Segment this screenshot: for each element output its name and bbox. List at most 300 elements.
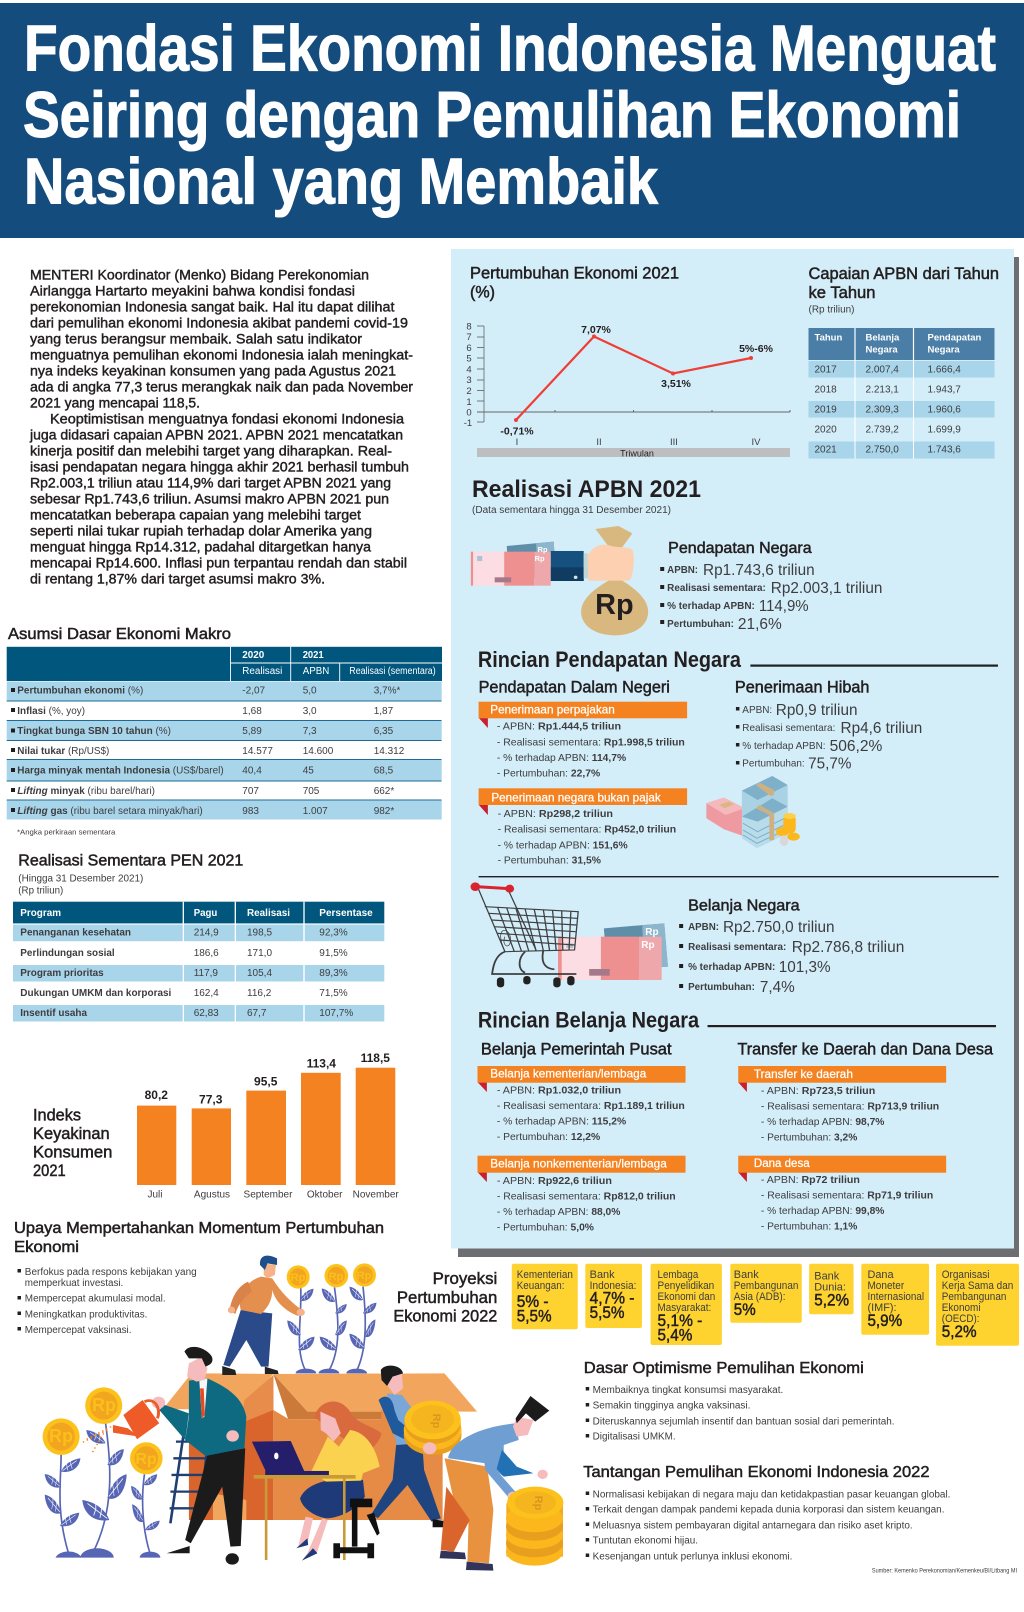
month labels: Agustus [194,1189,230,1200]
card: Bank Indonesia [585,1264,642,1328]
table rows: 62,83 [194,1008,219,1019]
table rows: 662* [374,786,394,797]
block: Dasar Optimisme Pemulihan Ekonomi: Dasar Optimisme Pemulihan Ekonomi [584,1360,864,1377]
list: kementerian: - Pertumbuhan: 12,2% [497,1132,601,1143]
block: Belanja Negara: Belanja Negara [688,898,800,915]
ribbon: Belanja nonkementerian/lembaga [477,1156,686,1182]
block: Belanja Negara: % terhadap APBN: [688,962,775,973]
data line [514,334,753,422]
card: ADB: Pembangunan [734,1280,798,1292]
ribbon: Transfer ke daerah: Transfer ke daerah [754,1069,853,1081]
table rows: 162,4 [194,988,219,999]
card: Bank Indonesia: 4,7% - [590,1288,634,1308]
intro text block: yang terus berangsur membaik. Salah satu indikator [30,332,363,346]
chart title: Keyakinan [33,1125,110,1143]
list: dana desa [761,1175,933,1233]
section: Penerimaan Hibah: Pertumbuhan: [742,758,805,770]
table rows [13,925,384,1022]
bar values: 80,2 [145,1088,168,1102]
table rows: 186,6 [194,948,219,959]
list: bukan pajak: - Pertumbuhan: 31,5% [498,856,602,867]
table rows: 2020 [814,424,837,436]
table heading: (Rp triliun) [808,304,854,316]
table heading [18,852,243,896]
list: upaya: memperkuat investasi. [25,1278,123,1289]
man carrying coins [367,1366,462,1536]
table rows: 107,7% [319,1008,353,1019]
block: Tantangan Pemulihan Ekonomi Indonesia 2022: Meluasnya sistem pembayaran digital antarnegara dan risiko aset kripto. [593,1520,913,1531]
intro text block [29,268,414,586]
table rows: Nilai tukar (Rp/US$) [17,746,109,757]
table header: Persentase [319,908,373,919]
block: Belanja Negara: 7,4% [760,979,795,996]
data labels: 5%-6% [739,343,774,355]
intro text block: seperti nilai tukar rupiah terhadap dolar Amerika yang [30,524,372,538]
icon: shopping cart with banknotes [471,882,668,987]
heading: Pertumbuhan [397,1288,497,1307]
panel: projections, optimism and challenges [393,1264,1019,1575]
icon: hand with money bag [471,526,648,635]
table rows: 105,4 [247,968,272,979]
card: Bank Indonesia: Bank [590,1269,615,1281]
section: Belanja Pemerintah Pusat [477,1040,686,1234]
table rows: 7,3 [303,726,317,737]
table header: Tahun [814,332,842,344]
table rows: 117,9 [194,968,218,979]
list: dana desa: - % terhadap APBN: 99,8% [761,1206,885,1217]
heading [393,1269,497,1326]
list: bukan pajak [498,809,676,867]
list: transfer: - % terhadap APBN: 98,7% [761,1117,885,1128]
intro text block: ada di angka 77,3 terus merangkak naik dan pada November [30,380,414,394]
block: Tantangan Pemulihan Ekonomi Indonesia 2022: Tantangan Pemulihan Ekonomi Indonesia 2022 [583,1464,930,1481]
table rows: Perlindungan sosial [20,948,115,959]
bar chart: Indeks Keyakinan Konsumen 2021 [33,1051,399,1200]
card: LPEM: 5,1% - [658,1311,702,1330]
section: Penerimaan Hibah: Rp0,9 triliun [776,702,857,719]
block: Pendapatan Negara: Realisasi sementara: [667,583,766,594]
table heading: Realisasi Sementara PEN 2021 [18,852,243,870]
intro text block: isasi pendapatan negara hingga akhir 2021 berhasil tumbuh [30,460,409,474]
table rows: Program prioritas [20,968,104,979]
ribbon: Belanja nonkementerian/lembaga: Belanja nonkementerian/lembaga [490,1159,667,1171]
block: Belanja Negara: APBN: [688,922,719,933]
table: Realisasi Sementara PEN 2021 [13,852,384,1022]
card: Kementerian Keuangan: Keuangan: [517,1280,564,1292]
table rows: Tingkat bunga SBN 10 tahun (%) [17,726,171,737]
intro text block: mencatatkan beberapa capaian yang melebihi target [30,508,361,522]
table header: Program [20,908,61,919]
block: Dasar Optimisme Pemulihan Ekonomi: Diteruskannya sejumlah insentif dan bantuan sosial dari pemerintah. [593,1416,895,1427]
list: kementerian [497,1085,685,1143]
block: Dasar Optimisme Pemulihan Ekonomi: Membaiknya tingkat konsumsi masyarakat. [593,1385,783,1396]
heading: Upaya Mempertahankan Momentum: Ekonomi [14,1239,79,1256]
heading: Rincian Belanja Negara: Rincian Belanja Negara [478,1008,700,1033]
coins [43,1263,376,1474]
list: bukan pajak: - APBN: Rp298,2 triliun [498,809,613,820]
ribbon: Belanja kementerian/lembaga [477,1066,686,1092]
chart heading [470,264,679,302]
table rows: 705 [303,786,320,797]
chart title: Indeks [33,1106,81,1124]
table rows: 171,0 [247,948,272,959]
table heading: ke Tahun [808,284,876,302]
list: transfer: - Realisasi sementara: Rp713,9 triliun [761,1102,939,1113]
table rows: 3,7%* [374,686,400,697]
table heading: (Rp triliun) [18,886,63,896]
block: Pendapatan Negara: % terhadap APBN: [667,601,755,612]
card: Bank Dunia: Bank [814,1270,840,1283]
table rows: 6,35 [374,726,394,737]
table rows [808,361,994,458]
card: LPEM: Penyelidikan [658,1280,714,1292]
month labels: September [244,1189,293,1200]
card: IMF: Dana [867,1269,894,1281]
section: Belanja Pemerintah Pusat: Belanja Pemerintah Pusat [481,1040,672,1058]
ribbon: Belanja kementerian/lembaga: Belanja kementerian/lembaga [490,1068,647,1080]
month labels: November [353,1189,399,1200]
card: OECD: Kerja Sama dan [942,1280,1013,1292]
card: IMF: Moneter [867,1280,905,1292]
coin labels: Rp [329,1271,344,1283]
intro text block: 2021 yang mencapai 118,5. [30,396,200,410]
month labels: Juli [147,1189,163,1200]
heading: Realisasi APBN 2021: (Data sementara hingga 31 Desember 2021) [472,505,671,516]
table rows: 1.943,7 [928,384,961,396]
coin labels: Rp [430,1414,442,1429]
data labels: 3,51% [661,378,692,390]
card: Bank Indonesia: Indonesia: [590,1280,636,1292]
y axis: 1 [466,397,472,408]
block: Pendapatan Negara: 21,6% [738,616,782,633]
intro text block: Keoptimistisan menguatnya fondasi ekonomi Indonesia [50,412,405,426]
table rows: Insentif usaha [20,1008,87,1019]
table rows: 1.699,9 [928,424,961,436]
month labels [147,1189,399,1200]
table header: 2020 [242,650,265,661]
card: IMF [861,1264,929,1335]
heading: Realisasi APBN 2021 [472,476,701,516]
list: dana desa: - Realisasi sementara: Rp71,9 triliun [761,1190,933,1201]
chart title: 2021 [33,1162,66,1180]
list: upaya: Berfokus pada respons kebijakan yang [25,1267,197,1278]
list: nonkementerian: - APBN: Rp922,6 triliun [497,1176,612,1187]
bar values: 118,5 [361,1051,390,1065]
y axis: 4 [466,364,472,376]
ribbon: Dana desa [738,1156,946,1182]
card: Bank Indonesia: 5,5% [590,1303,624,1322]
block: Pendapatan Negara: Rp1.743,6 triliun [703,562,815,579]
box [163,1373,477,1520]
list: upaya: Mempercepat akumulasi modal. [25,1294,166,1305]
list: transfer [761,1086,939,1144]
table rows: 1.960,6 [928,404,961,416]
table rows: 5,0 [303,686,317,697]
block: Pendapatan Negara: Pendapatan Negara [668,540,812,557]
table rows: Lifting minyak (ribu barel/hari) [17,786,155,797]
intro text block: menguat hingga Rp14.312, padahal ditargetkan hanya [30,540,372,554]
y axis: 6 [466,343,472,354]
block: Tantangan Pemulihan Ekonomi Indonesia 2022: Normalisasi kebijakan di negara maju dan ketidakpastian pasar keuangan global. [593,1489,950,1500]
chart title: Konsumen [33,1144,112,1162]
section: Penerimaan Hibah [735,679,922,773]
card: OECD: (OECD): [942,1313,980,1325]
section: Penerimaan Hibah: % terhadap APBN: [742,741,826,752]
table rows: 2.007,4 [866,364,899,376]
table rows: 2.309,3 [866,404,899,416]
Triwulan axis bar [477,448,790,458]
table rows: Inflasi (%, yoy) [17,706,85,717]
chart title [33,1106,112,1180]
intro text block: perekonomian Indonesia sangat baik. Hal itu dapat dilihat [30,300,395,314]
ribbon: Penerimaan perpajakan: Penerimaan perpajakan [490,705,615,717]
table rows: 2018 [814,384,837,396]
man lifting coins [440,1396,563,1571]
icon: hand with money bag: Rp [538,545,548,554]
heading: Proyeksi [433,1269,497,1288]
plants left [60,1287,365,1553]
table header: Pendapatan [928,332,982,344]
coin labels: Rp [357,1270,372,1282]
block: Dasar Optimisme Pemulihan Ekonomi: Semakin tingginya angka vaksinasi. [593,1401,750,1412]
quarter labels: IV [752,437,761,448]
line chart: Pertumbuhan Ekonomi 2021 [464,264,790,458]
coin labels [49,1270,544,1511]
coin labels: Rp [532,1496,544,1511]
y axis: 5 [466,354,472,364]
list: perpajakan: - Realisasi sementara: Rp1.998,5 triliun [497,737,685,748]
section: Penerimaan Hibah: 75,7% [808,755,852,773]
footnote: *Angka perkiraan sementara [17,828,116,837]
section: Transfer ke Daerah dan Dana Desa [738,1040,994,1233]
table rows: 707 [242,786,259,797]
y axis: 2 [466,386,472,397]
list: upaya [18,1267,197,1336]
table rows: Pertumbuhan ekonomi (%) [17,686,143,697]
card: ADB: Bank [734,1269,759,1281]
table header: APBN [303,666,329,677]
card: OECD [936,1264,1019,1346]
table rows: Lifting gas (ribu barel setara minyak/hari) [17,806,203,817]
Triwulan axis bar: Triwulan [620,448,654,458]
list: nonkementerian: - Realisasi sementara: Rp812,0 triliun [497,1191,676,1202]
table rows: 2017 [814,364,837,376]
section: Penerimaan Hibah: APBN: [742,705,772,716]
header banner [0,3,1024,238]
section: Pendapatan Dalam Negeri: Pendapatan Dalam Negeri [479,679,670,697]
list: upaya: Mempercepat vaksinasi. [25,1325,131,1336]
list: bukan pajak: - % terhadap APBN: 151,6% [498,840,628,851]
list: transfer: - Pertumbuhan: 3,2% [761,1133,858,1144]
list: perpajakan: - APBN: Rp1.444,5 triliun [497,722,621,733]
card: Bank Dunia: Dunia: [814,1281,846,1294]
list: nonkementerian: - Pertumbuhan: 5,0% [497,1223,595,1234]
table header [808,328,994,458]
table header: Belanja [866,332,900,344]
list: upaya: Meningkatkan produktivitas. [25,1309,147,1320]
y axis: -1 [464,418,472,429]
card: Kementerian Keuangan: Kementerian [517,1269,573,1281]
card: LPEM: Masyarakat: [658,1302,711,1314]
chart heading: Pertumbuhan Ekonomi 2021 [470,264,679,282]
block: Proyeksi Pertumbuhan Ekonomi 2022 [393,1264,1019,1346]
ribbon: Penerimaan perpajakan [479,702,687,728]
panel: APBN blue background with shadow [451,249,1019,1257]
ladder [170,1423,207,1523]
table rows: 983 [242,806,259,817]
bars [137,1068,395,1185]
quarter labels: III [670,437,678,448]
bar values: 113,4 [307,1056,336,1070]
title: Nasional yang Membaik [24,144,659,218]
heading: Ekonomi 2022 [393,1306,497,1326]
card: Bank Dunia: 5,2% [814,1290,849,1310]
table header [7,647,442,681]
table header: Pagu [194,908,217,919]
ribbon: Transfer ke daerah [738,1066,946,1092]
list: nonkementerian [497,1176,676,1234]
heading: Upaya Mempertahankan Momentum [14,1220,384,1256]
block: Pendapatan Negara [660,540,882,633]
intro text block: menguatnya pemulihan ekonomi Indonesia ialah meningkat- [30,348,413,362]
intro text block: di rentang 1,87% dari target asumsi makro 3%. [30,572,325,586]
table rows: 2.739,2 [866,424,899,436]
y axis: 7 [466,332,472,343]
section: Penerimaan Hibah: Penerimaan Hibah [735,679,869,697]
table rows: Dukungan UMKM dan korporasi [20,988,172,999]
icon: stacks of money and coins [706,776,800,848]
card: ADB: 5% [734,1300,756,1319]
quarter labels [516,437,761,448]
block: Pendapatan Negara: APBN: [667,565,698,576]
coin labels: Rp [135,1451,157,1468]
list: kementerian: - % terhadap APBN: 115,2% [497,1116,627,1127]
table header: Realisasi [242,666,282,677]
table rows: -2,07 [242,686,266,697]
table header: Realisasi (sementara) [349,666,436,677]
card: ADB [730,1264,802,1323]
y axis: 8 [466,322,472,332]
man on top of box [222,1256,305,1375]
table header: 2021 [303,650,324,661]
table rows: 92,3% [319,928,348,939]
list: perpajakan: - % terhadap APBN: 114,7% [497,753,627,764]
table rows: 89,3% [319,968,348,979]
block: Dasar Optimisme Pemulihan Ekonomi [584,1360,895,1443]
table rows: 40,4 [242,766,262,777]
title [23,12,996,218]
card: ADB: Asia (ADB): [734,1291,785,1303]
y axis: 3 [466,375,472,386]
block: Tantangan Pemulihan Ekonomi Indonesia 2022: Tuntutan ekonomi hijau. [593,1536,698,1547]
ribbon: Penerimaan negara bukan pajak: Penerimaan negara bukan pajak [491,792,661,804]
table rows [7,682,442,820]
coin labels: Rp [92,1395,116,1415]
intro text block: mencapai Rp14.600. Inflasi pun terpantau rendah dan stabil [30,556,407,570]
intro text block: MENTERI Koordinator (Menko) Bidang Perekonomian [30,268,369,282]
section: Penerimaan Hibah: Realisasi sementara: [742,723,835,734]
table: Asumsi Dasar Ekonomi Makro [7,626,442,837]
quarter labels: II [596,437,602,448]
list: dana desa: - APBN: Rp72 triliun [761,1175,860,1186]
table rows: 14.577 [242,746,273,757]
table rows: 198,5 [247,928,272,939]
block: Belanja Negara: Rp2.750,0 triliun [723,919,835,936]
block: Belanja Negara: Pertumbuhan: [688,982,755,993]
quarter labels: I [516,437,518,448]
heading: Rincian Pendapatan Negara: Rincian Pendapatan Negara [478,647,742,672]
table heading [808,265,999,316]
chart heading: (%) [470,284,495,302]
bar values [145,1051,390,1106]
card: Bank Dunia [809,1264,854,1314]
card: LPEM: Ekonomi dan [658,1291,715,1303]
woman at laptop [252,1402,382,1561]
table header: Realisasi [247,908,290,919]
section: Transfer ke Daerah dan Dana Desa: Transfer ke Daerah dan Dana Desa [738,1040,994,1058]
table rows: 1.666,4 [928,364,961,376]
table rows: 1.007 [303,806,328,817]
list: kementerian: - APBN: Rp1.032,0 triliun [497,1085,621,1096]
y axis [464,322,484,429]
card: LPEM [651,1264,722,1345]
card: OECD: 5,2% [942,1322,977,1341]
table rows: 116,2 [247,988,272,999]
card: OECD: Pembangunan [942,1291,1006,1303]
table heading: Asumsi Dasar Ekonomi Makro [8,626,231,643]
table rows: 1,68 [242,706,262,717]
divider [479,876,999,877]
ribbon: Dana desa: Dana desa [754,1158,810,1170]
card: Kementerian Keuangan: 5,5% [517,1306,552,1326]
icon: hand with money bag: Rp [535,554,545,563]
heading: Upaya Mempertahankan Momentum: Upaya Mempertahankan Momentum Pertumbuhan [14,1220,384,1237]
table rows: 1,87 [374,706,394,717]
table rows: 2019 [814,404,837,416]
block: Belanja Negara: 101,3% [779,959,831,976]
icon: hand with money bag: Rp [595,589,634,621]
table rows: 71,5% [319,988,348,999]
card: IMF: (IMF): [867,1302,897,1314]
panel: APBN revenue and spending details: Rp [641,940,655,951]
table: Capaian APBN [808,265,999,458]
table header: Negara [928,344,960,356]
section: Penerimaan Hibah: Rp4,6 triliun [841,720,922,737]
table heading: (Hingga 31 Desember 2021) [18,874,143,884]
table rows: 2.750,0 [866,444,899,456]
card: Kementerian Keuangan: 5% - [517,1292,549,1311]
list: transfer: - APBN: Rp723,5 triliun [761,1086,875,1097]
block: Tantangan Pemulihan Ekonomi Indonesia 2022 [583,1464,950,1562]
intro text block: sebesar Rp1.743,6 triliun. Asumsi makro APBN 2021 pun [30,492,389,506]
y axis: 0 [466,408,472,418]
table rows: Penanganan kesehatan [20,928,131,939]
data labels [500,324,774,438]
list: perpajakan [497,722,685,779]
section: Penerimaan Hibah: 506,2% [830,738,882,755]
table rows: Harga minyak mentah Indonesia (US$/barel) [17,766,224,777]
block: Pendapatan Negara: 114,9% [759,598,809,615]
intro text block: nya indeks keyakinan konsumen yang pada Agustus 2021 [30,364,396,378]
list: perpajakan: - Pertumbuhan: 22,7% [497,768,601,779]
block: Pendapatan Negara: Rp2.003,1 triliun [771,580,882,597]
data labels: -0,71% [500,426,534,438]
table rows: 14.600 [303,746,334,757]
month labels: Oktober [307,1189,343,1200]
card: OECD: Ekonomi [942,1302,981,1314]
panel: APBN revenue and spending details [471,526,999,1234]
block: Dasar Optimisme Pemulihan Ekonomi: Digitalisasi UMKM. [593,1432,676,1443]
